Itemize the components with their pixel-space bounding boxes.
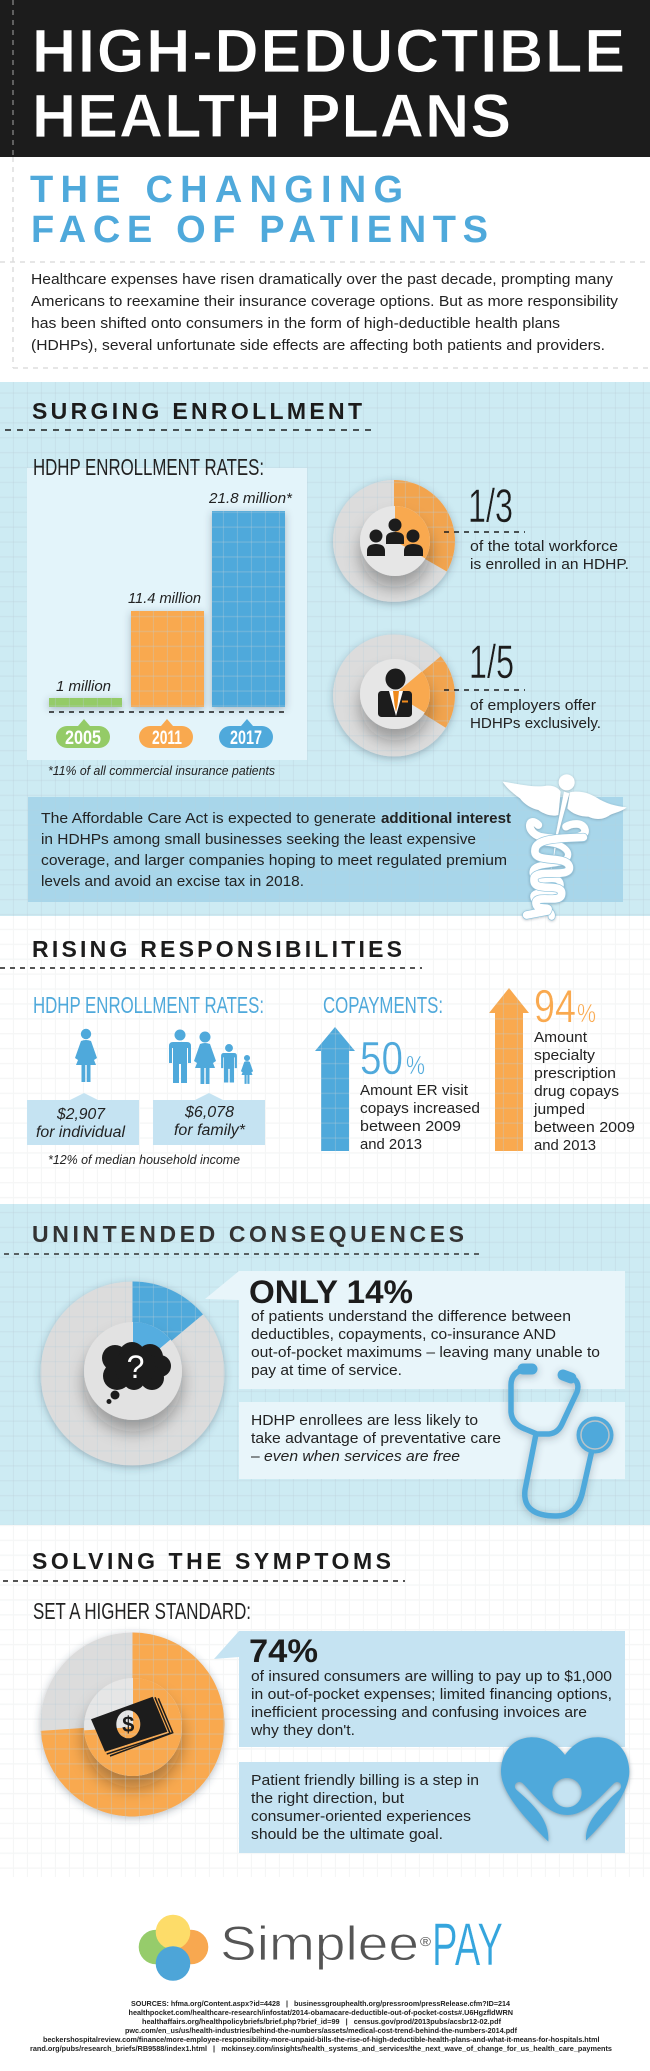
callout: only 14 percent: out-of-pocket maximums – leaving many unable to: [251, 1345, 600, 1361]
box: individual deductible: for individual: [36, 1124, 126, 1141]
subtitle: FACE OF PATIENTS: [31, 209, 488, 251]
sources: healthpocket.com/healthcare-research/infostat/2014-obamacare-deductible-out-of-pocket-costs#.U6HgzfldWRN: [128, 2008, 513, 2017]
heading: unintended consequences: UNINTENDED CONSEQUENCES: [32, 1221, 464, 1247]
panel: unintended consequences background: [0, 1204, 650, 1525]
icon: stethoscope: [511, 1369, 614, 1516]
callout: only 14 percent: of patients understand the difference between: [251, 1309, 571, 1325]
stat: 50 percent: 50: [360, 1032, 403, 1084]
year tags: [56, 719, 273, 749]
callout: patient friendly billing: consumer-oriented experiences: [251, 1809, 471, 1825]
callout: affordable care act: additional interest: [381, 810, 511, 827]
text: specialty copays: and 2013: [534, 1137, 596, 1154]
callout: preventative care: take advantage of preventative care: [251, 1431, 501, 1447]
callout: preventative care: – even when services are free: [251, 1449, 460, 1465]
panel: rising responsibilities background: [0, 916, 650, 1204]
text: specialty copays: [533, 1029, 635, 1154]
stat: 1/5: 1/5: [469, 635, 514, 688]
heading: rising responsibilities: RISING RESPONSIBILITIES: [32, 936, 402, 962]
callout: affordable care act: The Affordable Care Act is expected to generate: [41, 810, 376, 827]
sources: rand.org/pubs/research_briefs/RB9588/index1.html | mckinsey.com/insights/health_systems_and_services/the_next_wave_of_change_for_us_health_care_payments: [30, 2044, 612, 2053]
callout: only 14 percent: pay at time of service.: [251, 1363, 402, 1379]
logo: ®: [420, 1934, 431, 1949]
intro text: has been shifted onto consumers in the form of high-deductible health plans: [31, 316, 560, 332]
icon: people: [367, 518, 423, 556]
stat: 94 percent: %: [577, 998, 596, 1028]
heading: copayments: COPAYMENTS:: [323, 992, 443, 1018]
intro text: Healthcare expenses have risen dramatically over the past decade, prompting many: [31, 272, 614, 288]
box: individual deductible: $2,907: [56, 1106, 106, 1123]
callout: affordable care act: levels and avoid an excise tax in 2018.: [41, 873, 304, 890]
panel: surging enrollment background: [0, 382, 650, 916]
bar value labels: 1 million: [56, 679, 111, 695]
callout: 74 percent: [214, 1631, 625, 1747]
callout: 74 percent: inefficient processing and confusing invoices are: [251, 1705, 587, 1721]
bar chart panel: [27, 454, 307, 760]
callout: only 14 percent: deductibles, copayments, co-insurance AND: [251, 1327, 556, 1343]
callout: affordable care act: [28, 797, 623, 902]
sources: beckershospitalreview.com/finance/more-employee-responsibility-more-unpaid-bills-the-rise-of-high-deductible-health-plans-and-what-it-means-for-hospitals.html: [43, 2035, 600, 2044]
bar value labels: 21.8 million*: [208, 491, 293, 507]
bars: [49, 511, 285, 707]
icon: family: [169, 1030, 253, 1084]
logo: PAY: [432, 1911, 503, 1978]
text: specialty copays: jumped: [533, 1101, 585, 1118]
arrow: blue up: [315, 1027, 355, 1151]
title: [32, 17, 625, 150]
box: family deductible: $6,078: [184, 1104, 234, 1121]
year tags: 2005: [65, 728, 101, 749]
intro text: [31, 272, 619, 354]
title: HEALTH PLANS: [32, 82, 511, 150]
icon: businessman: [378, 668, 412, 717]
stat: 1/3: 1/3: [468, 479, 513, 532]
icon: question cloud: ?: [127, 1349, 144, 1385]
icon: money: [91, 1697, 173, 1756]
stat: 1/3: is enrolled in an HDHP.: [470, 556, 629, 573]
stat: 1/5: [444, 635, 601, 732]
donut: one third: [333, 480, 455, 602]
arrow: orange up: [489, 988, 529, 1151]
text: ER copays: and 2013: [360, 1136, 422, 1153]
icon: caduceus: [503, 774, 627, 929]
sources: pwc.com/en_us/us/health-industries/behind-the-numbers/assets/medical-cost-trend-behind-the-numbers-2014.pdf: [125, 2026, 517, 2035]
header band: [0, 0, 650, 157]
donut: 14 percent: [40, 1282, 224, 1466]
text: ER copays: [360, 1082, 480, 1153]
panel: solving the symptoms background: [0, 1525, 650, 1877]
chart footnote: *11% of all commercial insurance patients: [48, 763, 275, 778]
callout: only 14 percent: [205, 1271, 625, 1389]
icon: money: $: [122, 1712, 134, 1737]
bar value labels: 11.4 million: [128, 591, 201, 607]
icon: individual: [75, 1029, 97, 1082]
stat: 50 percent: %: [406, 1050, 425, 1080]
text: specialty copays: between 2009: [534, 1119, 635, 1136]
text: ER copays: copays increased: [360, 1100, 480, 1117]
sources: healthaffairs.org/healthpolicybriefs/brief.php?brief_id=99 | census.gov/prod/2013pubs/acsbr12-02.pdf: [142, 2017, 501, 2026]
stat: 1/3: [444, 479, 629, 573]
donut: one fifth: [333, 634, 455, 756]
bar value labels: [56, 491, 293, 695]
heading: deductibles: HDHP ENROLLMENT RATES:: [33, 992, 264, 1018]
intro text: Americans to reexamine their insurance coverage options. But as more responsibility: [31, 294, 619, 310]
box: family deductible: for family*: [174, 1122, 246, 1139]
callout: 74 percent: in out-of-pocket expenses; limited financing options,: [251, 1687, 612, 1703]
stat: 1/3: of the total workforce: [470, 538, 618, 555]
text: ER copays: Amount ER visit: [360, 1082, 469, 1099]
box: family deductible: [153, 1093, 265, 1145]
sources: SOURCES: hfma.org/Content.aspx?id=4428 | businessgrouphealth.org/pressroom/pressRelease.cfm?ID=214: [131, 1999, 511, 2008]
subtitle: [30, 169, 488, 251]
year tags: 2017: [230, 728, 262, 749]
callout: patient friendly billing: Patient friendly billing is a step in: [251, 1773, 479, 1789]
text: specialty copays: drug copays: [534, 1083, 619, 1100]
subtitle: THE CHANGING: [30, 169, 403, 211]
chart title: HDHP ENROLLMENT RATES:: [33, 454, 264, 480]
callout: 74 percent: 74%: [249, 1633, 318, 1669]
text: ER copays: between 2009: [360, 1118, 461, 1135]
stat: 1/5: of employers offer: [470, 697, 596, 714]
text: specialty copays: prescription: [534, 1065, 616, 1082]
stat: 94 percent: 94: [534, 980, 576, 1032]
donut: 74 percent: [40, 1632, 224, 1816]
callout: affordable care act: coverage, and larger companies hoping to meet regulated premium: [41, 852, 507, 869]
intro text: (HDHPs), several unfortunate side effects are affecting both patients and providers.: [31, 338, 605, 354]
icon: question cloud: [102, 1342, 171, 1404]
text: specialty copays: Amount: [534, 1029, 588, 1046]
callout: affordable care act: in HDHPs among small businesses seeking the least expensive: [41, 831, 476, 848]
callout: 74 percent: why they don't.: [250, 1723, 355, 1739]
stat: 1/5: HDHPs exclusively.: [470, 715, 601, 732]
callout: patient friendly billing: should be the ultimate goal.: [251, 1827, 443, 1843]
callout: preventative care: [239, 1402, 625, 1479]
year tags: 2011: [152, 728, 182, 749]
heading: surging enrollment: SURGING ENROLLMENT: [32, 398, 362, 424]
subheading: set a higher standard: SET A HIGHER STANDARD:: [33, 1598, 251, 1624]
icon: heart with person: [501, 1737, 629, 1842]
heading: solving the symptoms: SOLVING THE SYMPTOMS: [32, 1548, 391, 1574]
callout: patient friendly billing: the right direction, but: [251, 1791, 404, 1807]
deductible footnote: *12% of median household income: [48, 1152, 240, 1167]
logo: [139, 1911, 503, 1981]
text: specialty copays: specialty: [534, 1047, 596, 1064]
callout: 74 percent: of insured consumers are willing to pay up to $1,000: [251, 1669, 612, 1685]
logo: Simplee: [220, 1918, 419, 1971]
callout: preventative care: HDHP enrollees are less likely to: [251, 1413, 478, 1429]
callout: patient friendly billing: [239, 1762, 625, 1853]
box: individual deductible: [27, 1093, 139, 1145]
sources: [30, 1999, 612, 2053]
title: HIGH-DEDUCTIBLE: [32, 17, 625, 85]
callout: only 14 percent: ONLY 14%: [249, 1274, 413, 1310]
